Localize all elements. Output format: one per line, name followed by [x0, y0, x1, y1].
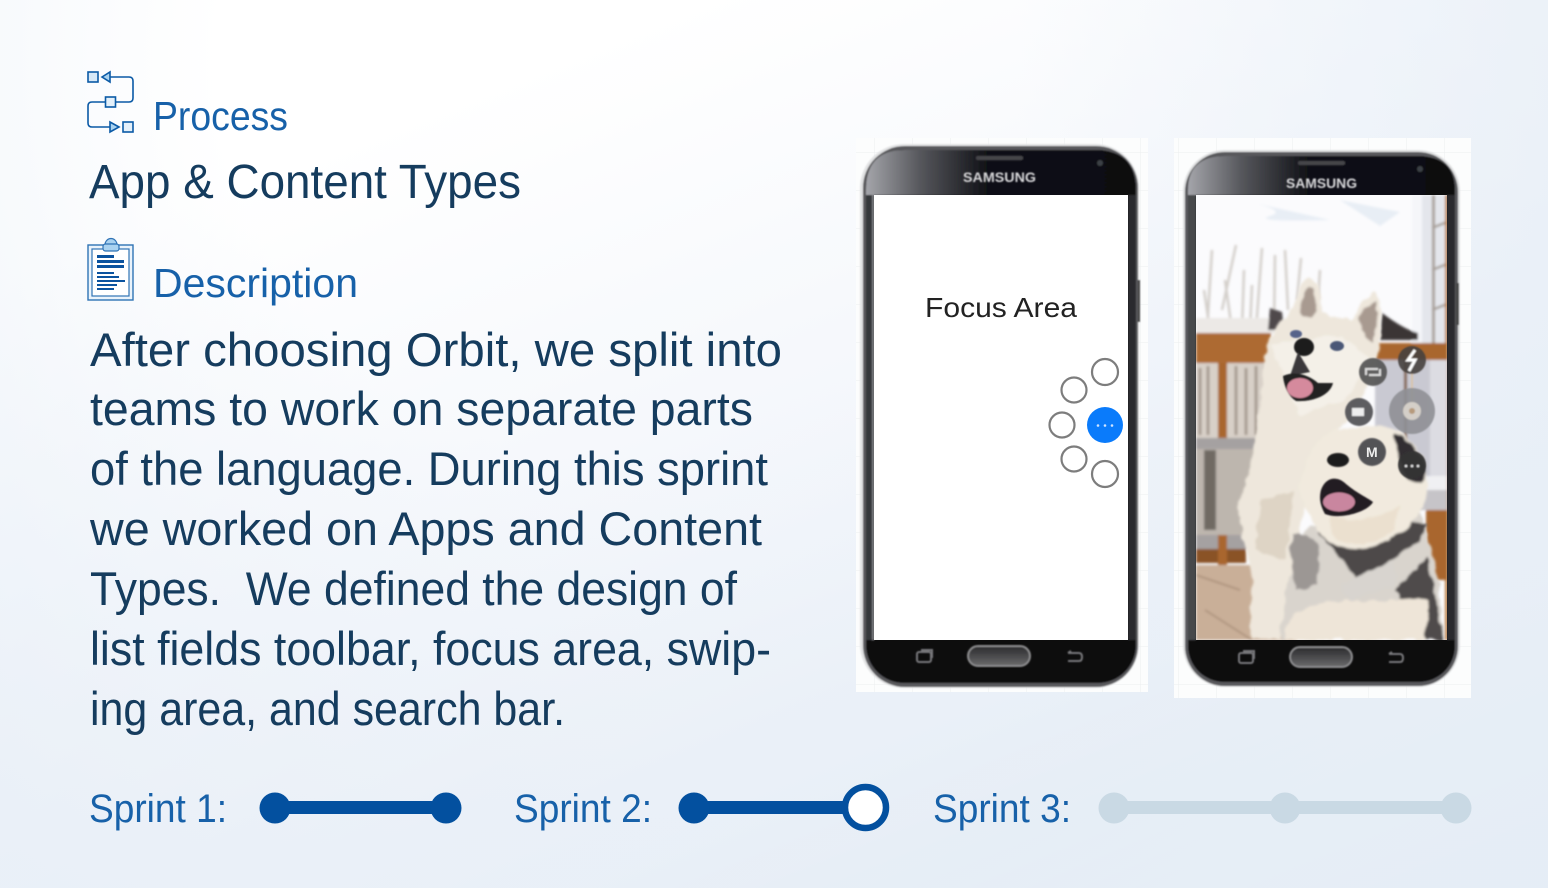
- panel: phone with husky photo: [1174, 138, 1471, 698]
- heading: Process: Process: [153, 93, 288, 139]
- progress: Sprint 2: [678, 787, 886, 828]
- photo: two husky dogs: [1196, 195, 1448, 640]
- label: Sprint 3: Sprint 3:: [933, 787, 1071, 831]
- icon: clipboard: [88, 239, 133, 300]
- overlay menu buttons: [1345, 346, 1435, 479]
- text block: description body: Types. We defined the design of: [90, 562, 738, 615]
- icon: process flow: [88, 72, 133, 132]
- text block: description body: teams to work on separate parts: [90, 382, 753, 435]
- floor: [1196, 565, 1296, 640]
- title: App & Content Types: App & Content Types: [89, 156, 521, 209]
- nav buttons: [917, 646, 1082, 666]
- big dog: [1239, 278, 1443, 640]
- text block: description body: After choosing Orbit, we split into: [90, 323, 782, 376]
- background details: [1267, 201, 1398, 226]
- progress: Sprint 3: [1098, 792, 1472, 824]
- text block: description body: we worked on Apps and Content: [89, 502, 762, 555]
- label: SAMSUNG: SAMSUNG: [963, 169, 1036, 185]
- radial menu buttons: [1050, 359, 1123, 487]
- big dog eyes and muzzle: [1290, 330, 1302, 338]
- progress: Sprint 1: [260, 792, 462, 824]
- label: Sprint 1: Sprint 1:: [89, 787, 227, 831]
- nav buttons: [1239, 647, 1403, 667]
- text block: description body: ing area, and search bar.: [90, 682, 565, 735]
- small dog body: [1281, 510, 1443, 640]
- small dog muzzle: [1327, 453, 1349, 467]
- screen label: Focus Area: Focus Area: [925, 292, 1077, 323]
- heading: Description: Description: [153, 260, 358, 306]
- text block: description body: [89, 323, 782, 735]
- panel: phone with focus area: [856, 138, 1148, 692]
- small dog head: [1299, 426, 1427, 549]
- screen: [874, 195, 1128, 640]
- label: Sprint 2: Sprint 2:: [514, 787, 652, 831]
- deck railing: [1196, 333, 1271, 363]
- text block: description body: list fields toolbar, focus area, swip-: [90, 622, 771, 675]
- text block: description body: of the language. During this sprint: [90, 442, 768, 495]
- photo: two husky dogs: M: [1366, 444, 1378, 460]
- label: SAMSUNG: SAMSUNG: [1286, 175, 1357, 191]
